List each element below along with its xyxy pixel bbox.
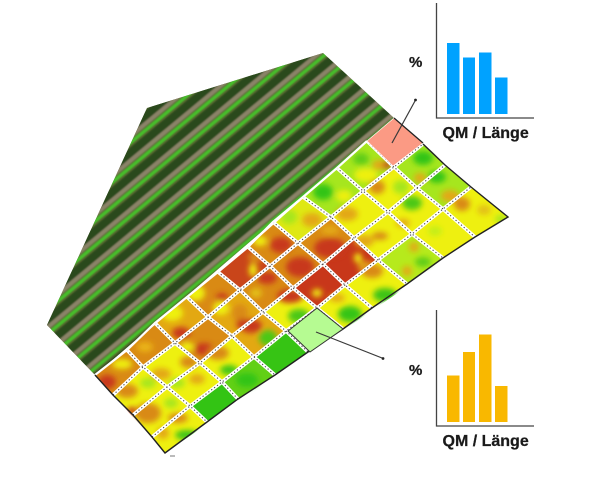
heat blobs <box>98 151 507 440</box>
y label: % <box>409 362 422 379</box>
grid outer edges <box>95 144 508 453</box>
axes <box>436 3 534 118</box>
blue bar chart <box>409 3 534 142</box>
tiny mark under grid <box>170 455 175 457</box>
highlighted cell: pink <box>367 118 423 166</box>
cell dividers <box>95 141 475 437</box>
y label: % <box>409 54 422 71</box>
x label: QM / Länge <box>442 433 529 450</box>
orange bar chart <box>409 310 534 450</box>
axes <box>436 310 534 426</box>
heat cell base colours <box>95 141 508 453</box>
aerial photo of crop field <box>47 53 394 375</box>
arrow: pink cell to blue chart <box>392 99 417 143</box>
pink cell top edge <box>394 118 423 143</box>
bars <box>447 334 508 422</box>
bars <box>447 43 508 114</box>
highlighted cell: pale green <box>288 308 343 352</box>
arrow: green cell to orange chart <box>316 332 384 360</box>
x label: QM / Länge <box>442 125 529 142</box>
heatmap grid <box>95 141 508 453</box>
